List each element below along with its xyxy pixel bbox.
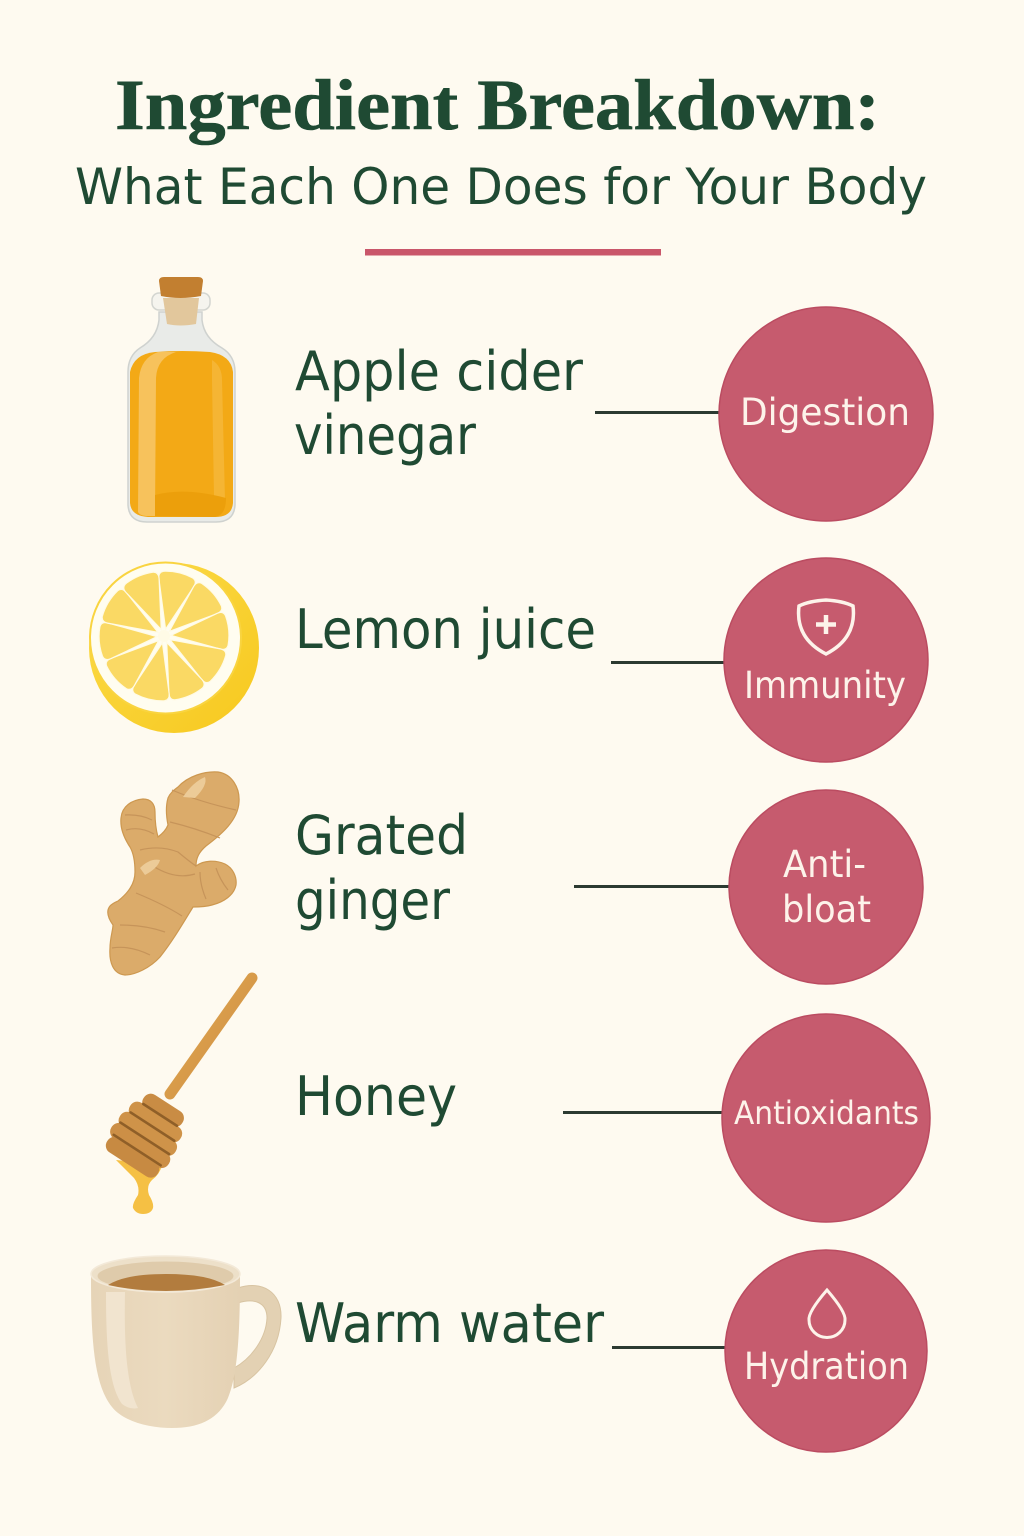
badge: immunity [724,558,928,762]
subtitle: What Each One Does for Your Body [75,158,927,216]
icon: shield [799,600,853,654]
badge: antioxidants: Antioxidants [734,1094,919,1132]
badge: anti-bloat: Anti- [783,843,866,886]
icon: water drop [809,1290,845,1338]
label: honey: Honey [295,1065,457,1128]
badge: digestion [719,307,933,521]
badge: anti-bloat: bloat [782,888,871,931]
title: Ingredient Breakdown: [115,65,880,145]
label: warm water: Warm water [295,1292,605,1355]
label: grated ginger: ginger [295,869,451,932]
row: apple cider vinegar [128,277,933,522]
label: apple cider vinegar [294,340,584,467]
label: grated ginger [295,804,468,932]
row: honey [99,978,930,1222]
icon: lemon [89,562,259,733]
connector [612,1346,725,1349]
icon: vinegar bottle [128,277,235,522]
row: lemon juice [89,558,928,762]
row: warm water [91,1250,927,1452]
badge: anti-bloat [729,790,923,984]
badge: antioxidants [722,1014,930,1222]
row: grated ginger [108,772,923,984]
title rule [365,249,661,256]
badge: hydration [725,1250,927,1452]
connector [611,661,725,664]
label: lemon juice: Lemon juice [295,598,596,661]
badge: immunity: Immunity [744,664,906,707]
label: grated ginger: Grated [295,804,468,867]
connector [563,1111,723,1114]
connector [574,885,730,888]
badge: hydration: Hydration [744,1345,909,1388]
badge: digestion: Digestion [740,391,910,434]
icon: ginger [108,772,239,975]
label: apple cider vinegar: vinegar [294,404,477,467]
label: apple cider vinegar: Apple cider [295,340,584,403]
icon: honey dipper [99,978,252,1214]
icon: mug [91,1256,281,1428]
connector [595,411,720,414]
